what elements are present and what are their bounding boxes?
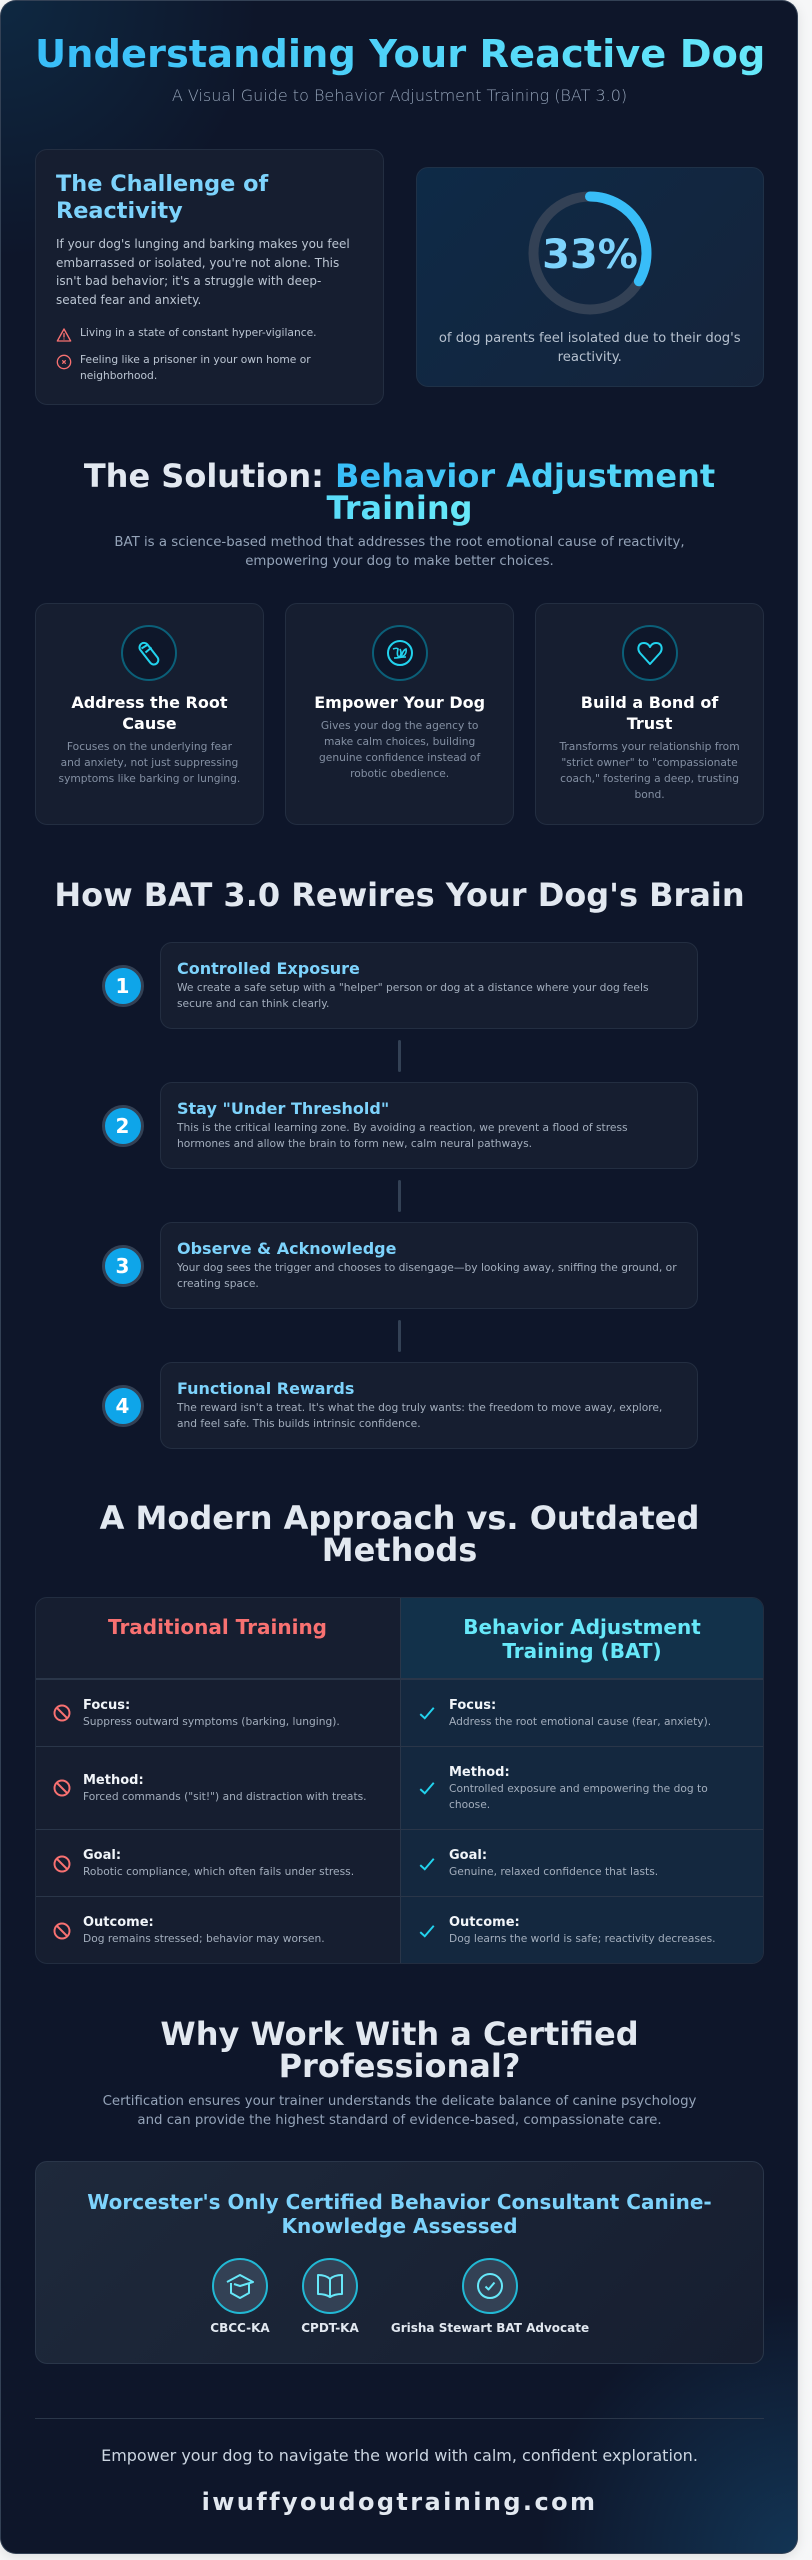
credentials title	[87, 2190, 712, 2238]
heading: certified professional	[160, 2015, 639, 2085]
text: address root	[59, 740, 240, 785]
step number 3	[102, 1245, 144, 1287]
step 3 text	[177, 1261, 677, 1290]
step 1 card	[160, 942, 698, 1029]
title: bond: Trust	[627, 714, 672, 733]
panel: empower your dog	[285, 603, 514, 825]
step 4 title: Functional Rewards	[177, 1379, 354, 1398]
step 1 text	[177, 981, 648, 1010]
label: BAT advocate: Grisha Stewart BAT Advocate	[391, 2321, 589, 2335]
row: BAT goal	[420, 1848, 658, 1878]
step 4 text: The reward isn't a treat. It's what the dog truly wants: the freedom to move away, explore,	[177, 1401, 662, 1414]
row: BAT outcome	[420, 1914, 716, 1945]
text: prisoner	[80, 353, 311, 382]
label: Outcome:	[83, 1914, 154, 1930]
text: hyper-vigilance: Living in a state of constant hyper-vigilance.	[80, 326, 317, 339]
title: address root	[71, 693, 228, 733]
icon: empower	[372, 625, 428, 681]
badge: CBCC-KA	[212, 2258, 268, 2314]
icon: check	[420, 1782, 434, 1795]
title: bond: Build a Bond of	[581, 693, 718, 712]
title: bond	[581, 693, 718, 733]
step 2 text: hormones and allow the brain to form new, calm neural pathways.	[177, 1137, 532, 1150]
panel: 33% statistic	[416, 167, 764, 387]
panel: credentials	[35, 2161, 764, 2364]
row: BAT method	[420, 1764, 708, 1811]
heading: certified professional: Why Work With a Certified	[160, 2015, 639, 2053]
header: traditional training: Traditional Training	[108, 1615, 327, 1639]
step number 3: 3	[116, 1254, 129, 1278]
comparison table	[35, 1597, 764, 1964]
text: bond: bond.	[634, 788, 665, 801]
icon: prohibited	[54, 1856, 70, 1872]
panel: address the root cause	[35, 603, 264, 825]
heading: the solution: The Solution: Behavior Adjustment	[84, 457, 715, 495]
footer tagline: Empower your dog to navigate the world with calm, confident exploration.	[101, 2446, 698, 2465]
label: CPDT-KA: CPDT-KA	[301, 2321, 359, 2335]
icon: check	[420, 1858, 434, 1871]
title: address root: Cause	[122, 714, 177, 733]
heading: challenge: The Challenge of	[56, 171, 268, 197]
text: certification intro	[103, 2094, 696, 2128]
panel: build a bond of trust	[535, 603, 764, 825]
icon: circled x	[56, 354, 72, 370]
text block: challenge description: If your dog's lunging and barking makes you feel	[56, 237, 350, 251]
icon: check	[420, 1925, 434, 1938]
text: solution intro: empowering your dog to make better choices.	[245, 554, 554, 569]
icon: prohibited	[54, 1922, 70, 1940]
text: address root: Focuses on the underlying fear	[67, 740, 232, 753]
text: solution intro	[114, 535, 685, 569]
step number 2	[102, 1105, 144, 1147]
step 3 text: Your dog sees the trigger and chooses to disengage—by looking away, sniffing the ground, or	[177, 1261, 677, 1274]
text: Suppress outward symptoms (barking, lunging).	[83, 1715, 340, 1728]
heading: modern approach: A Modern Approach vs. Outdated	[100, 1499, 699, 1537]
subtitle: A Visual Guide to Behavior Adjustment Training (BAT 3.0)	[172, 86, 627, 105]
credentials title: Worcester's Only Certified Behavior Consultant Canine-	[87, 2190, 712, 2214]
step number 1	[102, 965, 144, 1007]
step 2 card	[160, 1082, 698, 1169]
label: Outcome:	[449, 1914, 520, 1930]
title: empower: Empower Your Dog	[314, 693, 485, 712]
donut chart: 33%: 33%	[542, 232, 638, 278]
text: bond: "strict owner" to "compassionate	[561, 756, 738, 769]
row: traditional goal	[54, 1848, 354, 1878]
icon: check	[420, 1707, 434, 1720]
text block: challenge description: embarrassed or isolated, you're not alone. This	[56, 256, 339, 270]
text: Dog learns the world is safe; reactivity decreases.	[449, 1932, 716, 1945]
text: empower: robotic obedience.	[350, 767, 449, 780]
step 4 text	[176, 1401, 662, 1430]
step number 4	[102, 1385, 144, 1427]
text: statistic caption: reactivity.	[558, 350, 622, 365]
label: Goal:	[83, 1848, 121, 1862]
text: statistic caption: of dog parents feel isolated due to their dog's	[439, 331, 741, 346]
row: BAT focus	[420, 1698, 711, 1728]
heading: how BAT rewires: How BAT 3.0 Rewires Your Dog's Brain	[54, 876, 745, 914]
text: empower: Gives your dog the agency to	[321, 719, 478, 732]
heading: the solution: Training	[326, 489, 473, 527]
credentials title: Knowledge Assessed	[281, 2214, 518, 2238]
text: Address the root emotional cause (fear, anxiety).	[449, 1715, 711, 1728]
step 1 text: secure and can think clearly.	[177, 997, 329, 1010]
step 1 title: Controlled Exposure	[177, 959, 360, 978]
text: Forced commands ("sit!") and distraction with treats.	[83, 1790, 367, 1803]
text: choose.	[449, 1798, 490, 1811]
icon: heart	[622, 625, 678, 681]
header: BAT	[463, 1615, 701, 1663]
label: Focus:	[83, 1698, 130, 1712]
icon: root	[121, 625, 177, 681]
step 2 text	[176, 1121, 628, 1150]
heading: modern approach	[100, 1499, 699, 1569]
text: empower: make calm choices, building	[324, 735, 475, 748]
text: certification intro: and can provide the highest standard of evidence-based, compassionate care.	[137, 2113, 662, 2128]
text: Robotic compliance, which often fails under stress.	[83, 1865, 354, 1878]
label: Goal:	[449, 1848, 487, 1862]
panel: the challenge of reactivity	[35, 149, 384, 405]
text: certification intro: Certification ensures your trainer understands the delicate balance of canine psychology	[103, 2094, 696, 2109]
text: solution intro: BAT is a science-based method that addresses the root emotional cause of reactivity,	[114, 535, 685, 550]
label: Focus:	[449, 1698, 496, 1712]
heading: challenge	[56, 171, 268, 224]
text: prisoner: Feeling like a prisoner in your own home or	[80, 353, 311, 366]
text: Dog remains stressed; behavior may worsen.	[83, 1932, 325, 1945]
step 4 text: and feel safe. This builds intrinsic confidence.	[177, 1417, 421, 1430]
footer url: iwuffyoudogtraining.com	[202, 2488, 597, 2516]
BAT header background	[400, 1598, 766, 1678]
step 3 card	[160, 1222, 698, 1309]
BAT column background	[400, 1598, 766, 1965]
step 2 text: This is the critical learning zone. By avoiding a reaction, we prevent a flood of stress	[177, 1121, 628, 1134]
header: BAT: Behavior Adjustment	[463, 1615, 701, 1639]
step 4 card	[160, 1362, 698, 1449]
text	[449, 1782, 708, 1811]
title: address root: Address the Root	[71, 693, 227, 712]
header: BAT: Training (BAT)	[502, 1639, 662, 1663]
text: prisoner: neighborhood.	[80, 369, 157, 382]
text: address root: symptoms like barking or lunging.	[59, 772, 240, 785]
text: empower: genuine confidence instead of	[319, 751, 480, 764]
row: traditional focus	[54, 1698, 340, 1728]
title: Understanding Your Reactive Dog	[35, 32, 765, 77]
step 1 text: We create a safe setup with a "helper" person or dog at a distance where your dog feels	[177, 981, 648, 994]
donut chart: 33%	[528, 192, 652, 314]
text: Genuine, relaxed confidence that lasts.	[449, 1865, 658, 1878]
row: traditional method	[54, 1772, 367, 1803]
step number 2: 2	[116, 1114, 129, 1138]
text block: challenge description: isn't bad behavior; it's a struggle with deep-	[56, 274, 321, 288]
heading: the solution	[84, 457, 715, 527]
step number 4: 4	[116, 1394, 129, 1418]
icon: warning triangle	[56, 328, 72, 342]
text: address root: and anxiety, not just suppressing	[61, 756, 238, 769]
row: traditional outcome	[54, 1914, 325, 1945]
text block: challenge description	[56, 237, 350, 307]
label: CBCC-KA: CBCC-KA	[210, 2321, 270, 2335]
text: bond: coach," fostering a deep, trusting	[560, 772, 739, 785]
icon: prohibited	[54, 1780, 70, 1796]
badge: CPDT-KA	[302, 2258, 358, 2314]
text block: challenge description: seated fear and anxiety.	[56, 293, 201, 307]
step 3 title: Observe & Acknowledge	[177, 1239, 396, 1258]
heading: modern approach: Methods	[322, 1531, 477, 1569]
text: statistic caption	[439, 331, 741, 365]
badge: BAT advocate	[462, 2258, 518, 2314]
heading: challenge: Reactivity	[56, 198, 183, 224]
label: Method:	[83, 1772, 144, 1788]
step 3 text: creating space.	[177, 1277, 259, 1290]
text: empower	[319, 719, 480, 780]
text: bond: Transforms your relationship from	[559, 740, 740, 753]
heading: certified professional: Professional?	[279, 2047, 520, 2085]
text: Controlled exposure and empowering the dog to	[449, 1782, 708, 1795]
step number 1: 1	[116, 974, 129, 998]
label: Method:	[449, 1764, 510, 1780]
text: bond	[559, 740, 740, 801]
step 2 title: Stay "Under Threshold"	[177, 1099, 389, 1118]
icon: prohibited	[54, 1704, 70, 1722]
